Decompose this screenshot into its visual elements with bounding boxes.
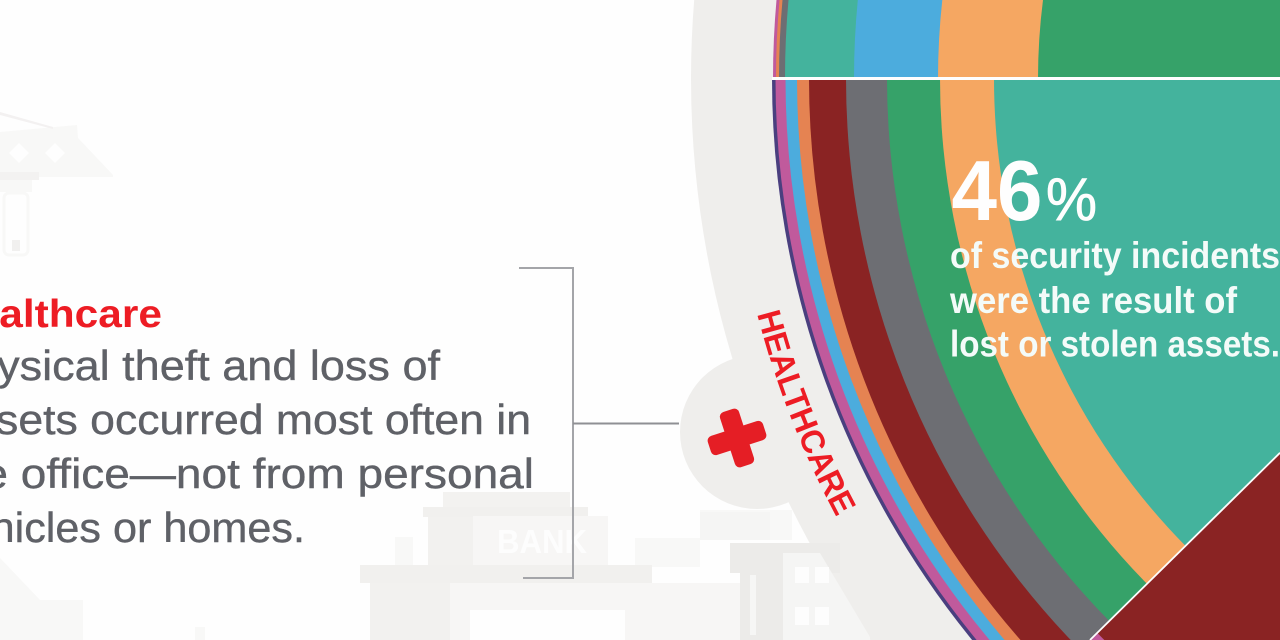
statistic: 46% xyxy=(952,144,1097,239)
icon: healthcare cross xyxy=(700,401,774,475)
background: bottom-left building silhouette xyxy=(0,558,205,640)
curved healthcare label: HEALTHCARE xyxy=(758,310,856,516)
background: office building silhouette xyxy=(700,512,870,640)
lower chart sector rings xyxy=(772,78,1280,640)
background: bank building silhouette xyxy=(360,492,792,640)
statistic description xyxy=(949,235,1280,364)
bank sign lettering: BANK xyxy=(497,523,587,560)
sector divider lines xyxy=(772,78,1280,640)
bottom chart sector xyxy=(1090,453,1280,640)
statistic description: were the result of xyxy=(949,280,1238,321)
bracket connector xyxy=(519,268,679,578)
upper chart sector rings xyxy=(773,0,1280,78)
statistic: 46%: 46 xyxy=(952,144,1042,239)
outer light-grey ring xyxy=(691,0,1280,640)
healthcare icon bubble xyxy=(680,355,834,509)
callout body text xyxy=(0,342,534,551)
statistic: 46%: % xyxy=(1046,166,1097,233)
background: top-left building silhouette xyxy=(0,112,113,255)
